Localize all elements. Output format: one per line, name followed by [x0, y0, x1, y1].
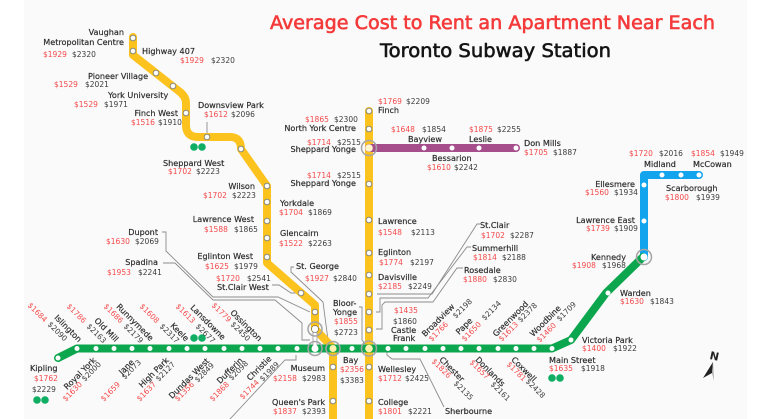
rotated labels above green line, east: $1650	[460, 320, 483, 343]
labels: Yonge branch: Summerhill	[472, 243, 518, 253]
labels: Sheppard line: $2255	[497, 125, 521, 134]
rotated labels below green line, west: $1744	[238, 378, 261, 401]
labels: Line 1 west branch: $1702	[203, 191, 227, 200]
labels: Scarborough line: McCowan	[693, 159, 732, 169]
labels: Yonge branch: $1435	[394, 306, 418, 315]
icon: GO transit at Downsview Park	[190, 143, 206, 151]
rotated labels below green line, west: $2073	[120, 358, 143, 381]
labels: Scarborough line: $1854	[691, 149, 715, 158]
rotated labels below green line, east: Chester	[437, 354, 467, 384]
labels: Sheppard line: Bayview	[408, 134, 442, 144]
labels: Line 1 west branch: $1910	[158, 118, 182, 127]
labels: Line 1 west branch: $2021	[85, 80, 109, 89]
rotated labels above green line, west: Lansdowne	[188, 302, 228, 342]
labels: Yonge branch: $2425	[405, 374, 429, 383]
labels: Line 1 west branch: $1630	[106, 237, 130, 246]
labels: Line 1 west branch: Wilson	[228, 181, 255, 191]
labels: Line 1 west branch: $1529	[54, 80, 78, 89]
title: Average Cost to Rent an Apartment Near Each	[270, 12, 715, 34]
rotated labels below green line, west: $1637	[135, 380, 158, 403]
labels: Scarborough line: $1739	[586, 224, 610, 233]
labels: Yonge branch: Sheppard Yonge	[291, 178, 356, 188]
labels: Yonge branch: St.Clair	[480, 220, 510, 230]
labels: Bloor-Danforth east end: $1630	[620, 297, 644, 306]
title	[270, 12, 715, 62]
rotated labels above green line, west: $1686	[102, 302, 125, 325]
labels: Yonge branch: Sherbourne	[445, 406, 492, 416]
labels: Yonge branch: $2185	[378, 282, 402, 291]
labels: Yonge branch	[284, 97, 534, 416]
labels: Line 1 west branch: $2069	[135, 237, 159, 246]
labels: Line 1 west branch: $2096	[231, 110, 255, 119]
labels: Scarborough line: $1949	[720, 149, 744, 158]
rotated labels above green line, east: Broadview	[419, 301, 457, 339]
labels: Line 1 west branch: $1625	[205, 262, 229, 271]
labels: Bloor-Danforth east end: Kennedy	[591, 252, 626, 262]
labels: Bloor-Danforth east end: $2229	[32, 385, 56, 394]
labels: Line 1 west branch: $2356	[340, 365, 364, 374]
labels: Line 1 west branch: Bay	[343, 355, 359, 365]
labels: Bloor-Danforth east end: Main Street	[549, 355, 596, 365]
labels: Line 1 west branch: $1979	[234, 262, 258, 271]
rotated labels above green line, west: $1786	[65, 302, 88, 325]
labels: Sheppard line: Bessarion	[432, 153, 472, 163]
rotated labels below green line, west: High Park	[136, 355, 171, 390]
stations: yellow lines	[130, 35, 372, 404]
labels: Scarborough line: $1939	[696, 193, 720, 202]
rotated labels above green line, east	[419, 297, 578, 344]
labels: Line 1 west branch: $1953	[107, 268, 131, 277]
labels: Yonge branch: Castle	[391, 325, 416, 335]
labels: Yonge branch: North York Centre	[284, 123, 356, 133]
labels: Line 1 west branch: $1927	[305, 274, 329, 283]
labels: Line 1 west branch: Downsview Park	[198, 100, 264, 110]
labels: Yonge branch: Rosedale	[464, 265, 501, 275]
labels: Sheppard line: Leslie	[469, 134, 492, 144]
labels: Line 1 west branch: $1869	[308, 208, 332, 217]
rotated labels below green line, west: Christie	[244, 354, 273, 383]
subway line: yellow Yonge branch	[365, 111, 373, 419]
labels: Line 1 west branch: Bloor-	[333, 298, 357, 308]
labels: Line 1 west branch: Spadina	[125, 257, 158, 267]
rotated labels below green line, west: $1659	[99, 380, 122, 403]
labels: Line 1 west branch: $2723	[334, 328, 358, 337]
labels: Sheppard line: Don Mills	[524, 138, 561, 148]
labels: Line 1 west branch: $1837	[273, 407, 297, 416]
labels: Yonge branch: $2209	[406, 97, 430, 106]
labels: Bloor-Danforth east end: Warden	[620, 288, 651, 298]
labels: Yonge branch: $1814	[473, 253, 497, 262]
labels: Yonge branch: $1714	[307, 138, 331, 147]
subway line: purple Sheppard	[369, 144, 516, 152]
labels: Line 1 west branch: $1529	[74, 100, 98, 109]
labels: Scarborough line: Midland	[644, 159, 676, 169]
labels: Line 1 west branch	[43, 27, 364, 416]
labels: Line 1 west branch: $2983	[302, 374, 326, 383]
rotated labels above green line, west: $1613	[174, 302, 197, 325]
labels: Line 1 west branch: $1704	[279, 208, 303, 217]
labels: Yonge branch: $1774	[379, 258, 403, 267]
labels: Yonge branch: $2515	[337, 138, 361, 147]
interchange rings	[308, 140, 652, 356]
labels: Line 1 west branch: York University	[107, 90, 168, 100]
rotated labels above green line, east: $2198	[451, 297, 474, 320]
labels: Bloor-Danforth east end: Victoria Park	[582, 335, 633, 345]
labels: Line 1 west branch: $1720	[216, 274, 240, 283]
labels: Scarborough line: $2016	[659, 149, 683, 158]
labels: Yonge branch: Sheppard Yonge	[291, 144, 356, 154]
rotated labels above green line, west	[26, 301, 264, 345]
labels: Line 1 west branch: $2223	[196, 167, 220, 176]
labels: Yonge branch: Wellesley	[378, 364, 416, 374]
rotated labels below green line, west: Dundas West	[166, 356, 211, 401]
labels: Line 1 west branch: Yorkdale	[279, 198, 314, 208]
rotated labels below green line, east: $1657	[468, 358, 491, 381]
labels: Scarborough line: $1560	[585, 188, 609, 197]
labels: Scarborough line: $1934	[614, 188, 638, 197]
labels: Line 1 west branch: $2393	[302, 407, 326, 416]
labels: Scarborough line	[576, 149, 744, 233]
rotated labels below green line, west: $2098	[227, 359, 250, 382]
rotated labels below green line, west: $1356	[173, 380, 196, 403]
labels: Yonge branch: $1702	[481, 231, 505, 240]
labels: Scarborough line: Scarborough	[666, 183, 717, 193]
rotated labels above green line, west: $1684	[26, 301, 49, 324]
labels: Line 1 west branch: Finch West	[134, 108, 178, 118]
labels: Line 1 west branch: St. George	[296, 261, 339, 271]
labels: Yonge branch: $1865	[305, 115, 329, 124]
labels: Sheppard line: $1705	[524, 148, 548, 157]
labels: Yonge branch: $1769	[378, 97, 402, 106]
labels: Bloor-Danforth east end: $1922	[613, 344, 637, 353]
labels: Yonge branch: $2197	[410, 258, 434, 267]
rotated labels above green line, east: $1460	[535, 321, 558, 344]
icon: north arrow	[703, 349, 720, 381]
rotated labels above green line, west: $1608	[138, 302, 161, 325]
rotated labels below green line, west: Jane	[116, 357, 136, 377]
rotated labels above green line, west: Runnymede	[114, 301, 156, 343]
labels: Yonge branch: $1880	[463, 275, 487, 284]
labels: Yonge branch: Davisville	[378, 272, 417, 282]
labels: Yonge branch: $2830	[493, 275, 517, 284]
subway line: blue Scarborough	[644, 175, 699, 257]
labels: Bloor-Danforth east end: $1635	[549, 364, 573, 373]
rotated labels above green line, west: $1779	[210, 301, 233, 324]
labels: Yonge branch: $1548	[378, 228, 402, 237]
labels: Line 1 west branch: Glencairn	[280, 228, 319, 238]
labels: Sheppard line: $1887	[553, 148, 577, 157]
rotated labels below green line, west: $1989	[258, 360, 281, 383]
rotated labels below green line, west: $1868	[208, 380, 231, 403]
rotated labels above green line, west: Old Mill	[92, 315, 121, 344]
labels: Line 1 west branch: $1522	[279, 239, 303, 248]
labels: Yonge branch: Finch	[378, 105, 399, 115]
connector lines	[162, 122, 480, 419]
title: Toronto Subway Station	[379, 40, 611, 62]
labels: Line 1 west branch: Lawrence West	[193, 214, 254, 224]
rotated labels above green line, west: Ossington	[228, 307, 264, 343]
labels: Sheppard line: $1610	[427, 163, 451, 172]
rotated labels above green line, west: Islington	[52, 312, 84, 344]
rotated labels below green line, west: $2849	[193, 361, 216, 384]
labels: Sheppard line: $1648	[391, 125, 415, 134]
rotated labels above green line, east: Pape	[453, 316, 474, 337]
labels: Line 1 west branch: Metropolitan Centre	[43, 37, 124, 47]
rotated labels below green line, west	[61, 354, 281, 403]
labels: Yonge branch: $2188	[502, 253, 526, 262]
labels: Yonge branch: $2221	[408, 407, 432, 416]
labels: Bloor-Danforth east end: $1968	[602, 261, 626, 270]
rotated labels below green line, east: $1826	[430, 357, 453, 380]
labels: Line 1 west branch: St.Clair West	[217, 282, 269, 292]
labels: Line 1 west branch: Highway 407	[142, 46, 195, 56]
rotated labels below green line, east: $2135	[452, 379, 475, 402]
labels: Line 1 west branch: Queen's Park	[272, 397, 325, 407]
labels: Line 1 west branch: $2320	[211, 56, 235, 65]
rotated labels below green line, west: Dufferin	[214, 355, 245, 386]
labels: Yonge branch: Eglinton	[378, 247, 411, 257]
icon: north arrow: N	[708, 349, 720, 364]
rotated labels below green line, west: Royal York	[61, 355, 98, 392]
labels: Line 1 west branch: Yonge	[332, 307, 357, 317]
rotated labels below green line, east: $2161	[489, 380, 512, 403]
labels: Yonge branch: $2249	[408, 282, 432, 291]
rotated labels above green line, west: $2450	[229, 320, 252, 343]
rotated labels above green line, west: Keele	[168, 320, 191, 343]
labels: Line 1 west branch: Museum	[291, 363, 325, 373]
labels: Line 1 west branch: Sheppard West	[163, 158, 224, 168]
rotated labels above green line, east: $1709	[555, 300, 578, 323]
subway line: yellow west branch	[133, 37, 333, 419]
labels: Bloor-Danforth east end: $1908	[572, 261, 596, 270]
rotated labels above green line, west: $2163	[85, 322, 108, 345]
rotated labels above green line, east: $1613	[497, 320, 520, 343]
icon: GO transit at Kipling	[33, 396, 49, 404]
labels: Line 1 west branch: $2223	[232, 191, 256, 200]
rotated labels above green line, west: $2090	[46, 320, 69, 343]
rotated labels below green line, west: $1630	[61, 380, 84, 403]
labels: Yonge branch: Frank	[393, 333, 415, 343]
labels: Yonge branch: $2515	[337, 171, 361, 180]
rotated labels below green line, east: Coxwell	[509, 354, 539, 384]
labels: Line 1 west branch: $2158	[273, 374, 297, 383]
labels: Yonge branch: Lawrence	[378, 216, 417, 226]
labels: Sheppard line: $2242	[454, 163, 478, 172]
labels: Line 1 west branch: Vaughan	[89, 27, 124, 37]
labels: Bloor-Danforth east end: $1843	[650, 297, 674, 306]
labels: Scarborough line: $1909	[614, 224, 638, 233]
rotated labels below green line, east: $2428	[524, 377, 547, 400]
labels: Sheppard line: $1875	[469, 125, 493, 134]
labels: Line 1 west branch: $2541	[247, 274, 271, 283]
labels: Bloor-Danforth east end: $1400	[582, 344, 606, 353]
rotated labels above green line, east: Greenwood	[490, 299, 530, 339]
labels: Line 1 west branch: $1865	[234, 225, 258, 234]
labels: Yonge branch: $2113	[411, 228, 435, 237]
labels: Scarborough line: Ellesmere	[595, 179, 635, 189]
labels: Line 1 west branch: $1929	[43, 50, 67, 59]
labels: Line 1 west branch: $1855	[334, 317, 358, 326]
rotated labels above green line, east: $2378	[516, 301, 539, 324]
rotated labels below green line, east: $1781	[505, 360, 528, 383]
rotated labels above green line, west: $2317	[158, 322, 181, 345]
rotated labels below green line, west: $2127	[154, 360, 177, 383]
labels: Bloor-Danforth east end: $1762	[34, 374, 58, 383]
labels: Yonge branch: $2287	[510, 231, 534, 240]
labels: Line 1 west branch: $1516	[131, 118, 155, 127]
labels: Line 1 west branch: $2840	[333, 274, 357, 283]
labels: Yonge branch: $2300	[334, 115, 358, 124]
stations: green, purple and blue lines	[56, 146, 702, 360]
labels: Scarborough line: $1720	[629, 149, 653, 158]
labels: Line 1 west branch: $3383	[340, 376, 364, 385]
rotated labels above green line, west: $2179	[122, 322, 145, 345]
labels: Yonge branch: College	[378, 397, 408, 407]
labels: Scarborough line: $1800	[665, 193, 689, 202]
labels: Line 1 west branch: $1971	[104, 100, 128, 109]
labels: Line 1 west branch: $1588	[204, 225, 228, 234]
labels: Yonge branch: $1714	[307, 171, 331, 180]
labels: Sheppard line: $1854	[422, 125, 446, 134]
labels: Yonge branch: $1712	[378, 374, 402, 383]
labels: Sheppard line	[391, 125, 577, 172]
labels: Yonge branch: $1860	[393, 317, 417, 326]
labels: Bloor-Danforth east end: Kipling	[30, 363, 57, 373]
labels: Yonge branch: $1801	[378, 407, 402, 416]
rotated labels above green line, west: $2677	[194, 322, 217, 345]
rotated labels below green line, east: Donlands	[473, 354, 507, 388]
labels: Bloor-Danforth east end: $1918	[581, 364, 605, 373]
labels: Line 1 west branch: $2241	[138, 268, 162, 277]
labels: Bloor-Danforth east end	[30, 252, 674, 394]
labels: Scarborough line: Lawrence East	[576, 215, 635, 225]
icon: GO transit at Main Street	[548, 374, 564, 382]
subway line: green Bloor-Danforth	[58, 257, 643, 358]
rotated labels above green line, east: $1766	[427, 320, 450, 343]
icon: GO transit at Keele	[190, 334, 206, 342]
labels: Line 1 west branch: $1929	[180, 56, 204, 65]
labels: Line 1 west branch: $1612	[204, 110, 228, 119]
labels: Line 1 west branch: $1702	[168, 167, 192, 176]
rotated labels below green line, east	[430, 354, 547, 403]
rotated labels below green line, west: $2000	[80, 360, 103, 383]
rotated labels above green line, east: Woodbine	[527, 303, 563, 339]
labels: Line 1 west branch: Eglinton West	[197, 251, 253, 261]
labels: Line 1 west branch: $2263	[308, 239, 332, 248]
labels: Line 1 west branch: Pioneer Village	[88, 71, 148, 81]
labels: Line 1 west branch: Dupont	[128, 227, 158, 237]
labels: Line 1 west branch: $2320	[72, 50, 96, 59]
rotated labels above green line, east: $2134	[480, 299, 503, 322]
